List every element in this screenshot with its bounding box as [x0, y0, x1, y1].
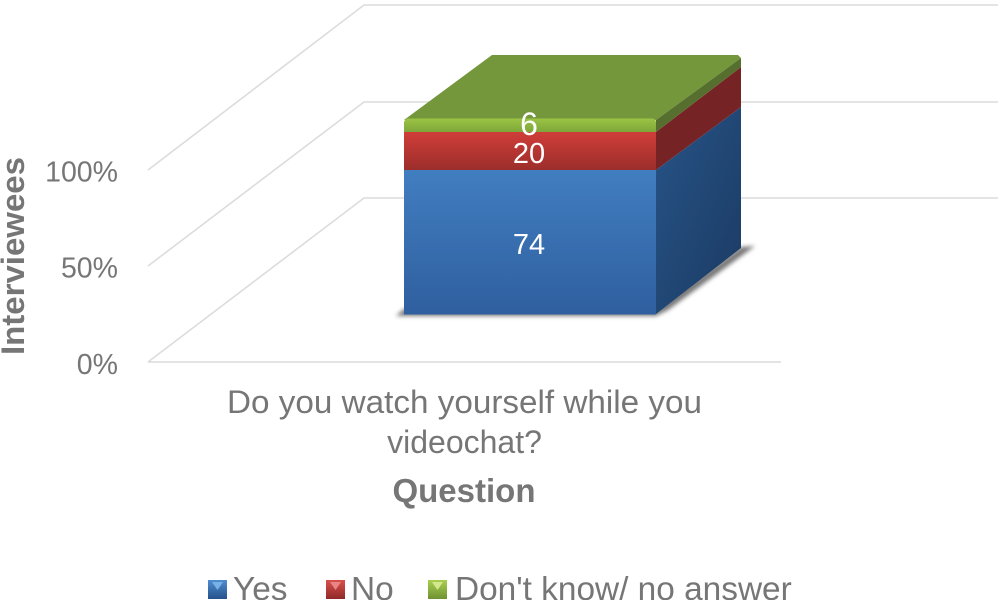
legend: no	[326, 571, 394, 600]
bar shadow	[396, 246, 755, 316]
y-axis tick labels: 50%	[61, 252, 118, 284]
segment: no 20	[404, 67, 741, 170]
x-axis category label: videochat?	[387, 424, 542, 460]
y-axis tick labels	[45, 156, 118, 381]
x-axis category label: Do you watch yourself while you	[227, 384, 702, 420]
legend: yes	[208, 571, 287, 600]
x-axis title: Question	[392, 472, 536, 509]
bar value labels: 6	[520, 106, 538, 142]
segment: don't know 6	[404, 55, 741, 132]
chart gridlines	[148, 5, 998, 362]
legend	[208, 571, 792, 600]
3D stacked bar	[396, 55, 755, 316]
x-axis category label	[227, 384, 702, 460]
y-axis tick labels: 100%	[45, 156, 118, 188]
bar value labels	[513, 106, 545, 261]
bar value labels: 74	[513, 229, 545, 261]
y-axis tick labels: 0%	[77, 349, 118, 381]
bar value labels: 20	[513, 138, 545, 170]
segment: yes 74	[404, 107, 741, 314]
